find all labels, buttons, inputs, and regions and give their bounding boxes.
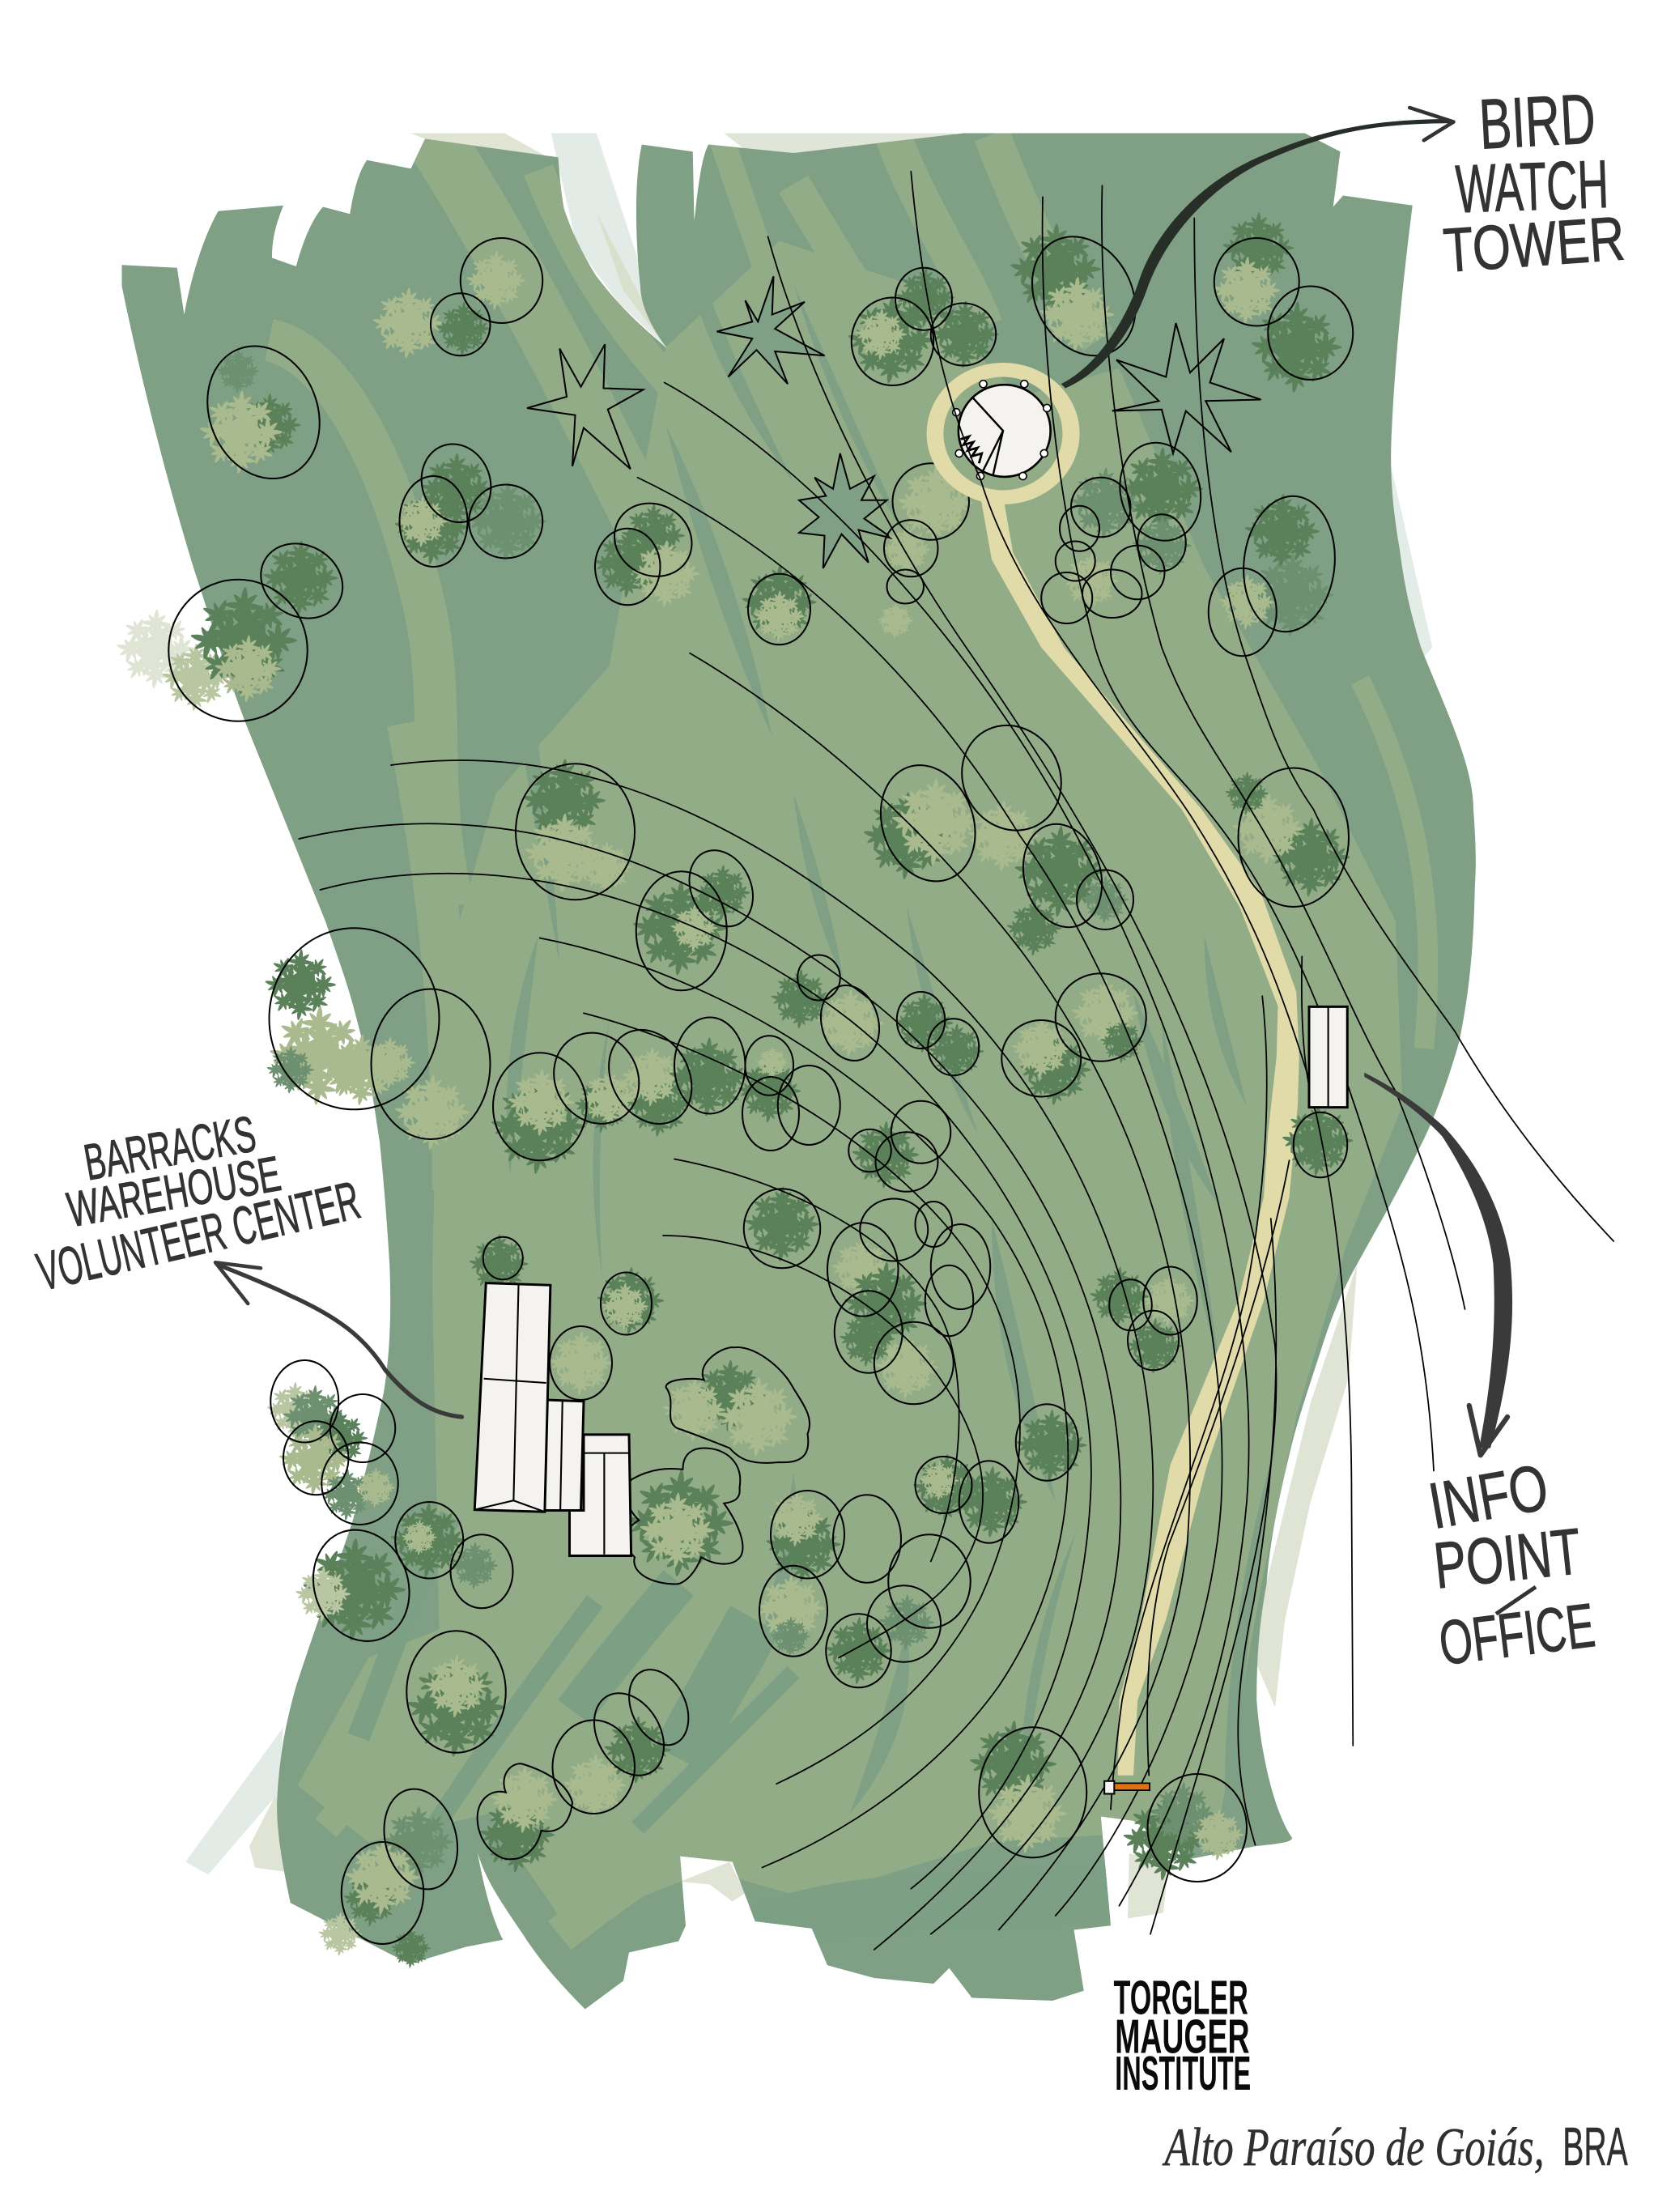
tree pair: west edge xyxy=(113,529,356,721)
logo: Torgler Mauger Institute: TORGLER xyxy=(1113,1971,1248,2025)
tree: east of path xyxy=(1223,768,1350,907)
tree cluster: centre dense grove xyxy=(742,1101,990,1404)
building: info point office xyxy=(1309,1006,1347,1108)
tower ramp lines xyxy=(971,397,1003,476)
tree cluster: south centre xyxy=(910,1404,1086,1543)
tree cluster: top left grove xyxy=(370,238,542,360)
label: barracks, warehouse, volunteer center: VOLUNTEER CENTER xyxy=(32,1170,365,1303)
tower posts xyxy=(953,381,1051,480)
tree pair: far east xyxy=(1209,491,1341,656)
contour lines xyxy=(299,172,1613,1950)
arrow: to info point xyxy=(1364,1073,1512,1455)
label: info point office xyxy=(1423,1451,1599,1678)
tree: north of barracks xyxy=(466,1233,529,1295)
tree: cloud canopy south xyxy=(623,1448,742,1585)
tree: large oval north of tower xyxy=(1006,219,1155,374)
bird watch tower xyxy=(927,363,1080,504)
foot path from the tower to the gate xyxy=(980,496,1299,1776)
label: barracks, warehouse, volunteer center xyxy=(32,1106,365,1303)
tree pair: south west corner xyxy=(317,1780,468,1969)
tree pair: east of barracks xyxy=(546,1266,664,1400)
label: bird watch tower xyxy=(1441,79,1627,286)
tree: gate east xyxy=(1120,1774,1247,1883)
tree cluster: small trio east xyxy=(1087,1266,1197,1376)
tree cluster: three trees xyxy=(392,434,546,567)
tree pair: north east xyxy=(1210,211,1353,395)
label: info point office: INFO xyxy=(1423,1451,1554,1543)
label: barracks, warehouse, volunteer center: WAREHOUSE xyxy=(63,1146,285,1237)
tree cluster: above the tower xyxy=(844,267,998,386)
tree: west canopy xyxy=(188,329,339,496)
stars: palm symbols xyxy=(527,276,1261,568)
tree: cloud canopy north xyxy=(660,1347,810,1463)
logo: Torgler Mauger Institute: INSTITUTE xyxy=(1115,2046,1251,2100)
tree cluster: east of the path xyxy=(1041,433,1211,623)
label: bird watch tower: BIRD xyxy=(1477,79,1597,164)
tree: beside the info point xyxy=(1279,1104,1353,1178)
tree cluster: central grove xyxy=(860,707,1133,957)
buildings: barracks, warehouse, volunteer center xyxy=(474,1283,631,1556)
tree pair: centre north xyxy=(591,489,705,610)
arrow: to bird watch tower xyxy=(1061,108,1453,389)
tower halo xyxy=(927,363,1080,504)
label: info point office: POINT xyxy=(1431,1515,1584,1603)
tower stairs xyxy=(960,436,982,463)
tree cluster: curved tree line west xyxy=(516,758,765,990)
terrain: green brushed mass with lighter and darker strokes xyxy=(85,113,1502,2026)
tree cluster: south grove xyxy=(755,1491,971,1687)
tree: single north xyxy=(738,564,817,644)
pale brush strokes behind the terrain xyxy=(185,134,1432,1918)
tree: gate west xyxy=(966,1719,1086,1857)
tree cluster: middle band xyxy=(768,955,1146,1108)
gate: checkpoint and orange barrier xyxy=(1104,1781,1150,1793)
tree cluster: south hedge xyxy=(477,1660,700,1874)
signature: location: Alto Paraíso de Goiás, xyxy=(1162,2118,1544,2177)
tree cluster: south west edge xyxy=(265,1360,512,1655)
tower disc xyxy=(959,385,1051,477)
tree cluster: hedge row xyxy=(262,928,840,1176)
tree cluster: south of stars xyxy=(876,455,978,640)
logo: Torgler Mauger Institute xyxy=(1113,1971,1251,2100)
logo: Torgler Mauger Institute: MAUGER xyxy=(1115,2010,1249,2064)
arrow: to barracks xyxy=(215,1262,461,1417)
tree: round canopy south west xyxy=(403,1631,506,1759)
label: barracks, warehouse, volunteer center: BARRACKS xyxy=(80,1106,260,1192)
